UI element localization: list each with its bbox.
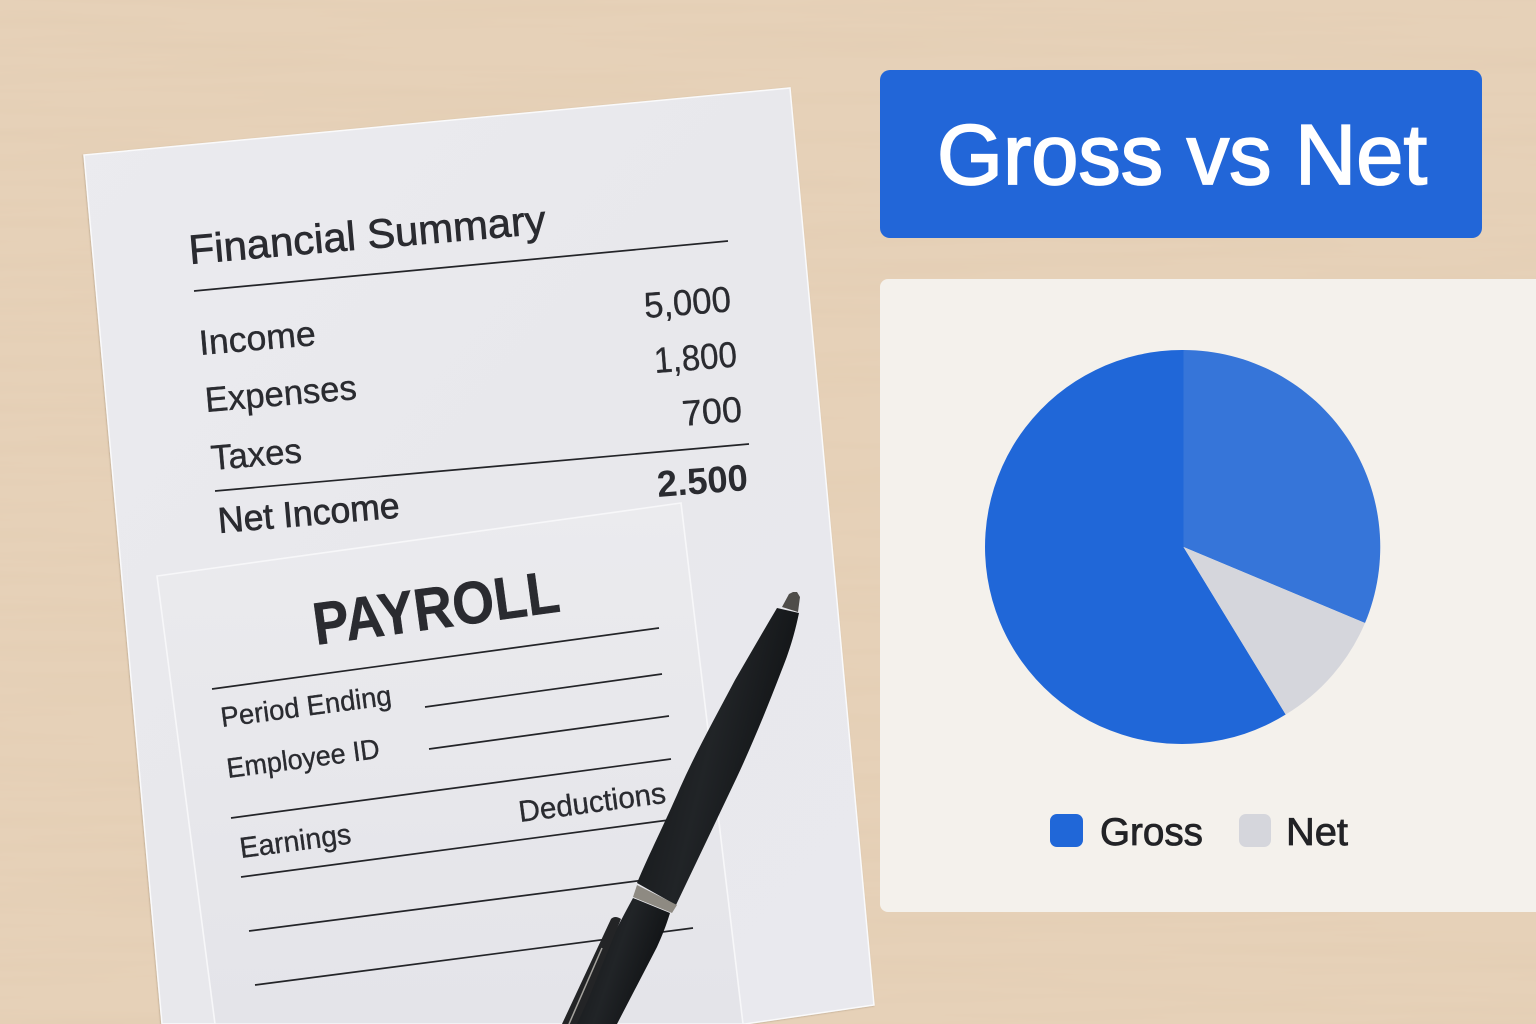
slice: net bbox=[1184, 547, 1365, 714]
title banner: Gross vs Net bbox=[937, 108, 1427, 203]
row: Net Income bbox=[216, 457, 749, 541]
panel: payroll form bbox=[157, 503, 743, 1024]
row: Expenses: 1,800 bbox=[652, 334, 738, 381]
slice: lighter gross bbox=[1184, 350, 1380, 623]
label: Earnings: Earnings bbox=[238, 819, 353, 865]
label: Employee ID: Employee ID bbox=[225, 733, 381, 784]
heading: PAYROLL: PAYROLL bbox=[309, 558, 563, 658]
row: Income: 5,000 bbox=[642, 278, 732, 326]
legend: Net: Net bbox=[1286, 811, 1348, 854]
row: Taxes: Taxes bbox=[209, 431, 303, 478]
sheet paper bbox=[84, 88, 874, 1024]
form paper bbox=[157, 503, 743, 1024]
row: Expenses bbox=[203, 334, 738, 420]
panel: pie chart card bbox=[880, 279, 1536, 912]
row: Net Income: Net Income bbox=[216, 485, 401, 541]
row: Income: Income bbox=[197, 314, 317, 363]
legend: Net bbox=[1239, 811, 1348, 854]
row: Taxes: 700 bbox=[680, 388, 743, 434]
slice: gross bbox=[985, 350, 1286, 744]
form rules bbox=[212, 628, 693, 985]
pie chart bbox=[985, 350, 1380, 744]
legend: Gross: Gross bbox=[1100, 811, 1203, 854]
row: Net Income: 2.500 bbox=[655, 457, 749, 505]
title banner bbox=[880, 70, 1482, 238]
icon: black pen bbox=[562, 592, 800, 1024]
row: Taxes bbox=[209, 388, 743, 478]
row: Income bbox=[197, 278, 732, 363]
heading: Financial Summary: Financial Summary bbox=[187, 197, 548, 273]
legend: Gross bbox=[1050, 811, 1203, 854]
label: Deductions: Deductions bbox=[517, 777, 668, 829]
row: Expenses: Expenses bbox=[203, 368, 358, 420]
summary rules bbox=[194, 241, 749, 491]
label: Period Ending: Period Ending bbox=[219, 680, 393, 733]
panel: financial summary sheet bbox=[84, 88, 874, 1024]
